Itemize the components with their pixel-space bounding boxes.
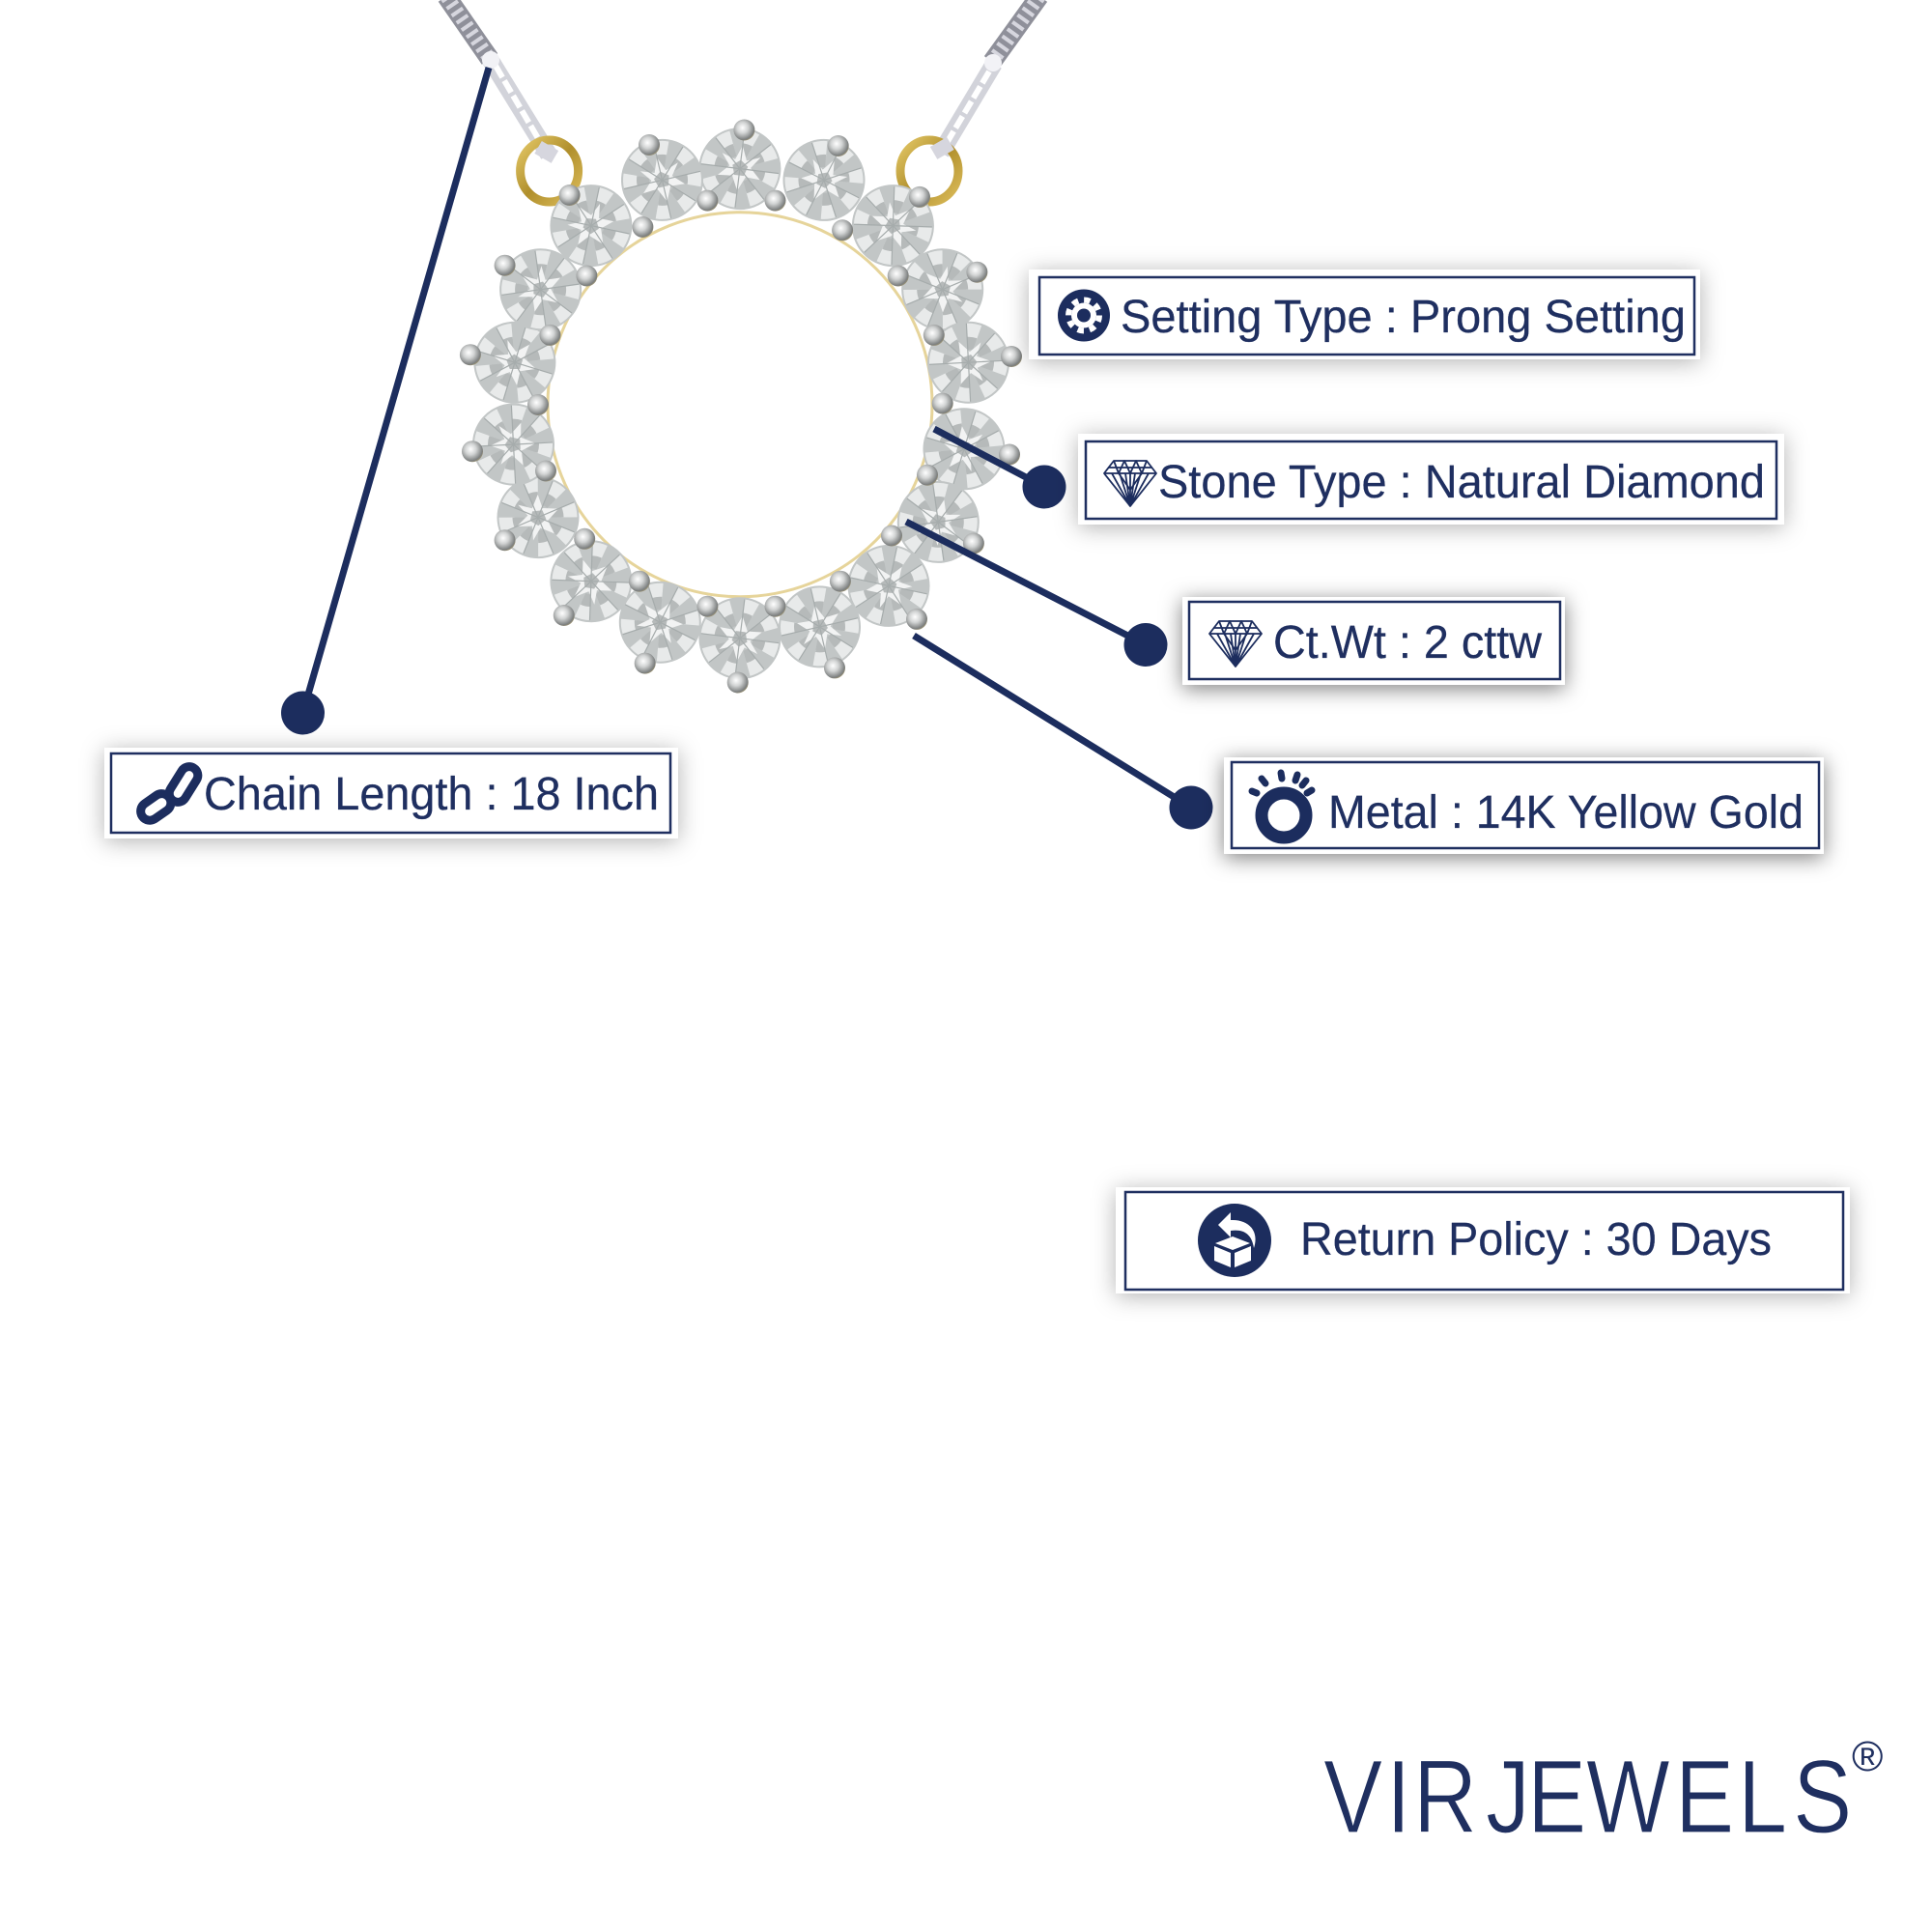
label: return policy: [1116, 1187, 1850, 1293]
label: stone type: [1078, 434, 1784, 525]
label: metal: Metal : 14K Yellow Gold: [1328, 787, 1804, 838]
leader: carat weight: [906, 522, 1167, 667]
label: carat weight: Ct.Wt : 2 cttw: [1273, 617, 1542, 668]
icon: diamond: [1104, 461, 1156, 506]
leader: stone type: [934, 429, 1066, 508]
diamonds: [464, 124, 1014, 684]
label: chain length: Chain Length : 18 Inch: [204, 769, 659, 820]
logo: VIR JEWELS: [1323, 1739, 1852, 1856]
left chain: [446, 0, 549, 155]
gold circle frame: [548, 213, 932, 597]
leader: chain length: [281, 68, 489, 734]
icon: diamond small: [1209, 621, 1262, 667]
gold jump rings: [521, 140, 958, 202]
label: chain length: [104, 748, 678, 838]
icon: return box: [1198, 1204, 1271, 1277]
prongs: [460, 120, 1022, 694]
label: carat weight: [1182, 597, 1565, 685]
label: return policy: Return Policy : 30 Days: [1300, 1214, 1772, 1265]
icon: chain links: [137, 763, 201, 824]
leader: metal: [914, 636, 1213, 829]
icon: gear: [1058, 290, 1110, 342]
logo: ®: [1852, 1733, 1883, 1780]
icon: ring: [1252, 773, 1312, 838]
label: stone type: Stone Type : Natural Diamond: [1158, 457, 1765, 508]
necklace photo: [446, 0, 1039, 694]
label: setting type: Setting Type : Prong Setting: [1121, 292, 1686, 343]
right chain: [941, 0, 1039, 153]
label: metal: [1224, 757, 1824, 854]
label: setting type: [1029, 270, 1700, 359]
